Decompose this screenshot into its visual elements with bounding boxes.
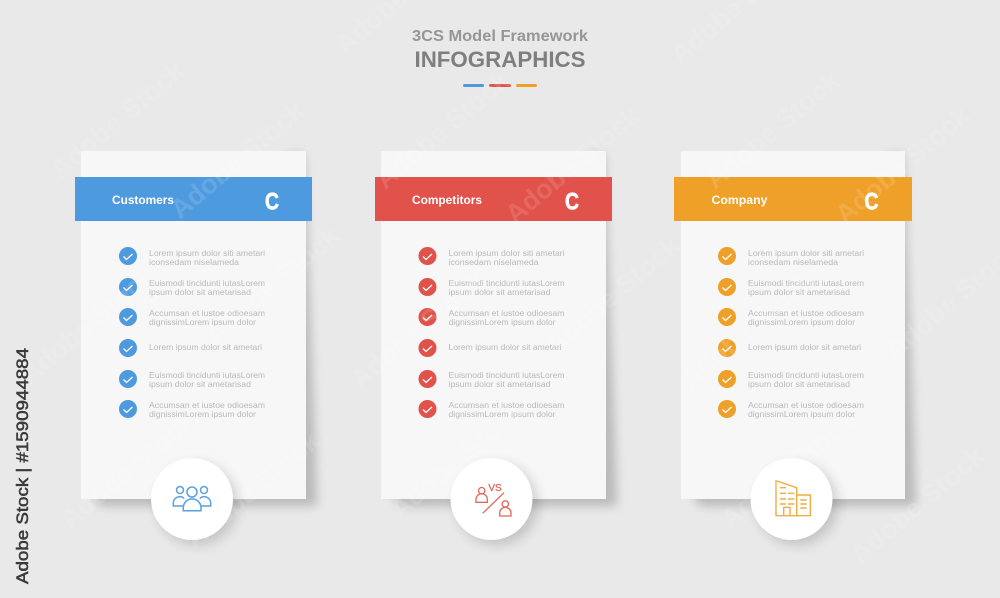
header band: C [864,188,878,216]
checklist [418,247,565,419]
watermark pattern: Adobe Stock [845,440,991,570]
item 1 [418,247,565,267]
item 4 [718,339,861,357]
header band [75,177,312,221]
item 6: dignissimLorem ipsum dolor [149,410,256,419]
item 1: iconsedam niselameda [748,258,839,267]
header band: Customers [112,193,174,207]
item 2: Euismodi tincidunti iutasLorem [448,279,565,288]
item 2 [119,278,265,297]
checklist [718,247,864,419]
stock id label: Adobe Stock | #1590944884 [13,348,32,584]
header band [674,177,912,221]
watermark pattern: Adobe Stock [500,100,646,230]
subtitle: 3CS Model Framework [412,28,588,45]
watermark pattern: Adobe Stock [830,100,976,230]
item 5: ipsum dolor sit ametarisad [748,380,850,389]
item 3: dignissimLorem ipsum dolor [748,318,855,327]
watermark pattern: Adobe Stock [715,405,861,535]
item 6: dignissimLorem ipsum dolor [448,410,556,419]
card shadow [390,154,617,506]
watermark pattern: Adobe Stock [200,220,346,350]
item 4: Lorem ipsum dolor sit ametari [149,343,262,352]
panel: company [674,151,916,545]
item 6: dignissimLorem ipsum dolor [748,410,855,419]
watermark pattern: Adobe Stock [675,265,821,395]
item 5 [418,370,565,389]
header band: C [565,188,579,216]
item 3 [119,308,265,327]
item 1 [119,247,265,267]
item 4 [119,339,262,357]
item 6: Accumsan et iustoe odioesam [448,401,565,410]
title [412,28,588,87]
icon: versus [450,458,538,545]
item 3: Accumsan et iustoe odioesam [448,309,565,318]
watermark pattern: Adobe Stock [15,260,161,390]
item 1: Lorem ipsum dolor siti ametari [448,249,565,258]
panel: customers [75,151,317,545]
icon: versus: VS [488,483,502,494]
item 3: Accumsan et iustoe odioesam [748,309,864,318]
item 4: Lorem ipsum dolor sit ametari [748,343,861,352]
item 6 [119,400,265,419]
item 1 [718,247,864,267]
item 2: ipsum dolor sit ametarisad [448,288,550,297]
item 1: Lorem ipsum dolor siti ametari [149,249,265,258]
item 6: Accumsan et iustoe odioesam [748,401,864,410]
item 5 [119,370,265,389]
item 3: dignissimLorem ipsum dolor [448,318,556,327]
item 5: ipsum dolor sit ametarisad [448,380,550,389]
item 6 [418,400,565,419]
item 2: Euismodi tincidunti iutasLorem [149,279,265,288]
item 5: Euismodi tincidunti iutasLorem [448,371,565,380]
watermark pattern: Adobe Stock [55,405,201,535]
card [381,151,606,499]
item 2 [718,278,864,297]
watermark pattern: Adobe Stock [700,65,846,195]
header band [375,177,612,221]
watermark pattern: Adobe Stock [165,95,311,225]
colour bars [463,84,537,87]
header band: C [265,188,279,216]
item 1: iconsedam niselameda [448,258,539,267]
item 4: Lorem ipsum dolor sit ametari [448,343,562,352]
item 3 [418,308,565,327]
item 5: ipsum dolor sit ametarisad [149,380,251,389]
watermark pattern: Adobe Stock [345,265,491,395]
watermark pattern: Adobe Stock [45,55,191,185]
item 5: Euismodi tincidunti iutasLorem [149,371,265,380]
card shadow [690,154,916,506]
card [81,151,306,499]
item 6: Accumsan et iustoe odioesam [149,401,265,410]
item 1: Lorem ipsum dolor siti ametari [748,249,864,258]
item 3: dignissimLorem ipsum dolor [149,318,256,327]
header band: Competitors [412,193,482,207]
item 2: ipsum dolor sit ametarisad [748,288,850,297]
main heading: INFOGRAPHICS [414,47,586,72]
icon: building [750,458,838,545]
item 3 [718,308,864,327]
item 2: ipsum dolor sit ametarisad [149,288,251,297]
item 5: Euismodi tincidunti iutasLorem [748,371,864,380]
item 2: Euismodi tincidunti iutasLorem [748,279,864,288]
icon: people [151,458,238,545]
header band: Company [712,193,768,207]
watermark pattern: Adobe Stock [385,395,531,525]
watermark pattern: Adobe Stock [180,425,326,555]
item 5 [718,370,864,389]
item 6 [718,400,864,419]
item 4 [418,339,562,357]
card shadow [90,154,317,506]
watermark pattern: Adobe Stock [540,230,686,360]
item 3: Accumsan et iustoe odioesam [149,309,265,318]
item 2 [418,278,565,297]
card [681,151,905,499]
panel: competitors [375,151,617,545]
checklist [119,247,265,419]
watermark pattern: Adobe Stock [370,65,516,195]
item 1: iconsedam niselameda [149,258,240,267]
